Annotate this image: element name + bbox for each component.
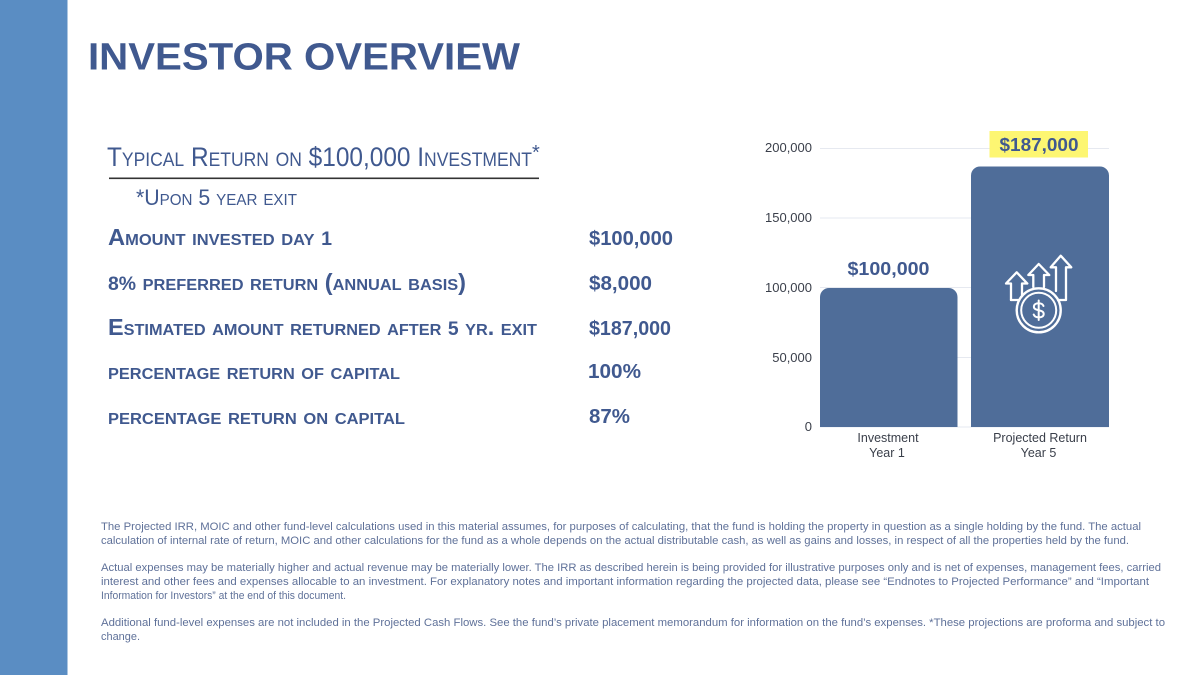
row: preferred return: 8% preferred return (annual basis) bbox=[108, 269, 466, 295]
row: return of capital: 100% bbox=[588, 360, 641, 383]
category label: projected return bbox=[993, 431, 1087, 460]
category label: investment: Investment bbox=[857, 431, 919, 445]
y axis grid lines bbox=[820, 148, 1109, 427]
paragraph 2 bbox=[101, 562, 1161, 602]
paragraph 1: calculation of internal rate of return, MOIC and other calculations for the fund as a whole depends on the actual distributable cash, as well as gains and losses, in respect of all the properties held by the fund. bbox=[101, 535, 1129, 547]
y axis labels bbox=[765, 140, 812, 434]
table heading: Typical Return on $100,000 Investment bbox=[107, 142, 532, 172]
panel: return table bbox=[107, 142, 673, 429]
row: return on capital: 87% bbox=[589, 405, 630, 428]
row: preferred return bbox=[108, 269, 652, 295]
row: estimated amount returned: Estimated amount returned after 5 yr. exit bbox=[108, 314, 537, 340]
category label: investment bbox=[857, 431, 919, 460]
y axis labels: 100,000 bbox=[765, 280, 812, 295]
icon: rising arrows and coin bbox=[1006, 256, 1071, 332]
row: amount invested: $100,000 bbox=[589, 227, 673, 250]
heading asterisk: * bbox=[532, 142, 540, 164]
paragraph 2: Actual expenses may be materially higher and actual revenue may be materially lower. The IRR as described herein is being provided for illustrative purposes only and is net of expenses, management fees, carried bbox=[101, 562, 1161, 574]
row: return on capital bbox=[108, 403, 630, 429]
category label: projected return: Projected Return bbox=[993, 431, 1087, 445]
category label: investment: Year 1 bbox=[869, 446, 905, 460]
category label: projected return: Year 5 bbox=[1021, 446, 1056, 460]
paragraph 1: The Projected IRR, MOIC and other fund-level calculations used in this material assumes, for purposes of calculating, that the fund is holding the property in question as a single holding by the fund. The actual bbox=[101, 521, 1141, 533]
bar: investment bbox=[820, 288, 958, 427]
paragraph 2: interest and other fees and expenses allocable to an investment. For explanatory notes and important information regarding the projected data, please see “Endnotes to Projected Performance” and “Important bbox=[101, 576, 1150, 588]
value label: 100,000: $100,000 bbox=[848, 258, 930, 279]
y axis labels: 0 bbox=[805, 419, 812, 434]
row: return on capital: percentage return on capital bbox=[108, 403, 405, 429]
title: INVESTOR OVERVIEW bbox=[88, 36, 520, 78]
bar chart bbox=[765, 131, 1109, 460]
bar: projected return bbox=[971, 166, 1109, 427]
y axis labels: 150,000 bbox=[765, 210, 812, 225]
row: amount invested: Amount invested day 1 bbox=[108, 224, 332, 250]
paragraph 3 bbox=[101, 617, 1165, 643]
heading underline bbox=[109, 178, 539, 179]
paragraph 1 bbox=[101, 521, 1141, 547]
value highlight: 187,000 bbox=[990, 131, 1088, 158]
disclaimer text bbox=[101, 521, 1165, 643]
row: amount invested bbox=[108, 224, 673, 250]
y axis labels: 50,000 bbox=[772, 350, 812, 365]
row: estimated amount returned: $187,000 bbox=[589, 317, 671, 340]
row: preferred return: $8,000 bbox=[589, 272, 652, 295]
sidebar bbox=[0, 0, 68, 675]
y axis labels: 200,000 bbox=[765, 140, 812, 155]
paragraph 2: Information for Investors” at the end of this document. bbox=[101, 590, 346, 602]
paragraph 3: Additional fund-level expenses are not included in the Projected Cash Flows. See the fund’s private placement memorandum for information on the fund’s expenses. *These projections are proforma and subject to bbox=[101, 617, 1165, 629]
footnote: upon 5 year exit: *Upon 5 year exit bbox=[136, 185, 297, 210]
value highlight: 187,000: $187,000 bbox=[1000, 134, 1078, 155]
paragraph 3: change. bbox=[101, 631, 140, 643]
row: return of capital bbox=[108, 358, 641, 384]
row: return of capital: percentage return of capital bbox=[108, 358, 400, 384]
